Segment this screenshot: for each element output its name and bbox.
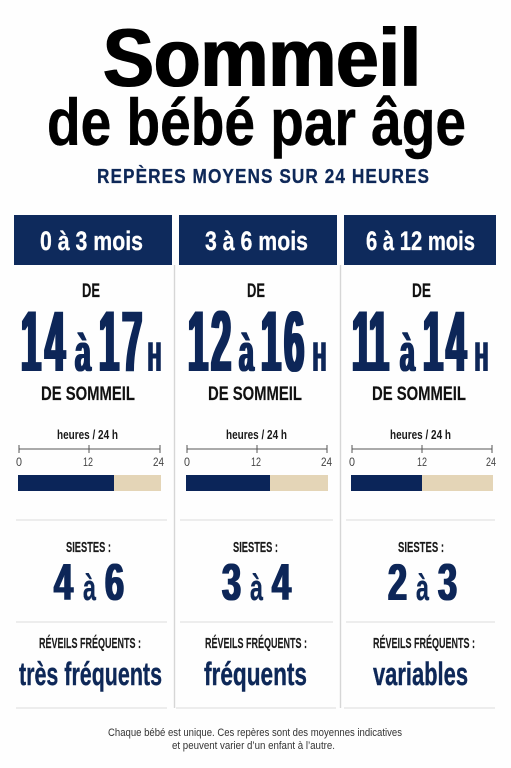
sleep range: DE SOMMEIL [41, 384, 135, 405]
naps [388, 540, 457, 612]
naps: SIESTES : [66, 540, 111, 556]
night wakings: très fréquents [19, 656, 162, 692]
naps [54, 540, 124, 612]
sleep range [352, 281, 488, 405]
naps: à [250, 567, 264, 608]
night wakings: variables [373, 656, 468, 692]
naps: 3 [222, 554, 241, 612]
panel: 3 à 6 mois: H [313, 333, 326, 380]
panel: 0 à 3 mois: H [148, 333, 161, 380]
panel: 0 à 3 mois [14, 215, 172, 708]
chart: hours of 24 [16, 428, 164, 491]
naps: 4 [272, 554, 291, 612]
chart: hours of 24: 0 [349, 455, 355, 469]
panel: 3 à 6 mois [176, 215, 337, 708]
naps: 3 [438, 554, 457, 612]
sleep range: DE SOMMEIL [372, 384, 466, 405]
sleep range: 16 [261, 293, 304, 389]
naps: 6 [105, 554, 124, 612]
night wakings: RÉVEILS FRÉQUENTS : [39, 635, 141, 652]
sleep range: DE [82, 281, 100, 302]
sleep range: 12 [188, 293, 231, 389]
chart: hours of 24 [184, 428, 332, 491]
chart: hours of 24: 12 [251, 455, 261, 469]
column header: 0 à 3 mois [40, 226, 143, 256]
chart: hours of 24: heures / 24 h [57, 428, 118, 442]
footnote: et peuvent varier d’un enfant à l’autre. [172, 740, 335, 752]
night wakings [204, 635, 307, 692]
sleep range: à [400, 324, 415, 383]
sleep range: 14 [423, 293, 466, 389]
chart: hours of 24: heures / 24 h [390, 428, 451, 442]
subtitle: REPÈRES MOYENS SUR 24 HEURES [97, 165, 429, 187]
chart: hours of 24: 12 [417, 455, 427, 469]
sleep range: 11 [352, 293, 389, 389]
chart: hours of 24: 24 [153, 455, 164, 469]
sleep range: à [239, 324, 254, 383]
chart: hours of 24: 0 [16, 455, 22, 469]
chart: hours of 24: 0 [184, 455, 190, 469]
sleep range: 14 [21, 293, 65, 389]
column header [344, 215, 496, 265]
panel: 6 à 12 mois [344, 215, 496, 708]
night wakings: RÉVEILS FRÉQUENTS : [205, 635, 307, 652]
naps: SIESTES : [233, 540, 278, 556]
chart: hours of 24: 24 [486, 455, 496, 469]
night wakings [373, 635, 475, 692]
chart: hours of 24: heures / 24 h [226, 428, 287, 442]
naps: à [83, 567, 97, 608]
title [47, 11, 466, 159]
column header [14, 215, 172, 265]
sleep range [188, 281, 326, 405]
night wakings: fréquents [204, 656, 307, 692]
footnote: Chaque bébé est unique. Ces repères sont des moyennes indicatives [108, 727, 402, 739]
sleep range: à [75, 324, 91, 383]
column header: 6 à 12 mois [366, 226, 475, 256]
naps [222, 540, 291, 612]
naps: 4 [54, 554, 73, 612]
chart: hours of 24: 12 [83, 455, 93, 469]
column header [179, 215, 337, 265]
sleep range [21, 281, 161, 405]
chart: hours of 24 [349, 428, 496, 491]
title: Sommeil [103, 11, 421, 104]
sleep range: DE [247, 281, 265, 302]
sleep range: 17 [99, 293, 142, 389]
night wakings [19, 635, 162, 692]
naps: à [416, 567, 430, 608]
panel: 6 à 12 mois: H [475, 333, 488, 380]
column header: 3 à 6 mois [205, 226, 308, 256]
chart: hours of 24: 24 [321, 455, 332, 469]
footnote [108, 727, 402, 752]
sleep range: DE [412, 281, 431, 302]
sleep range: DE SOMMEIL [208, 384, 302, 405]
naps: 2 [388, 554, 407, 612]
naps: SIESTES : [398, 540, 444, 556]
